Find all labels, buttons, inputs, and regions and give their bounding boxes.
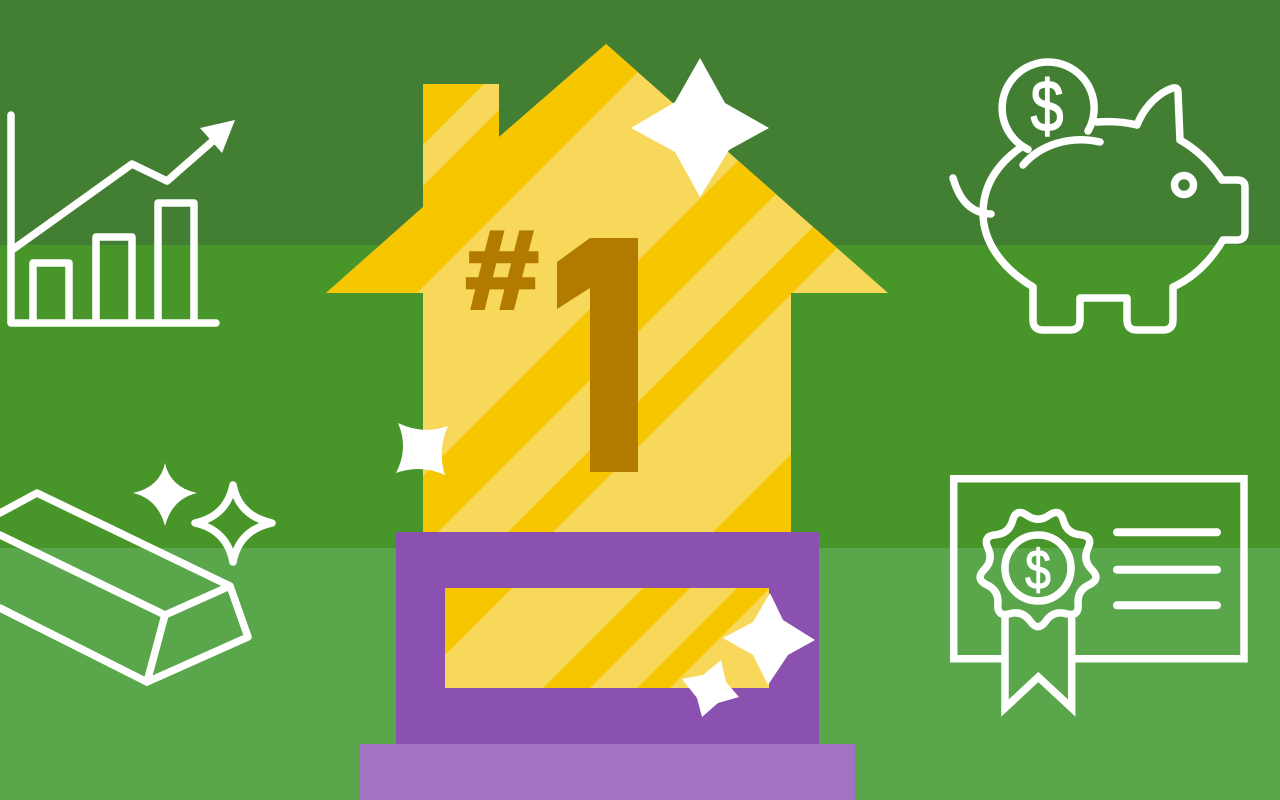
sparkles on trophy <box>396 58 815 717</box>
icon: piggy bank: $ <box>1031 65 1063 146</box>
icon: piggy bank <box>953 62 1245 330</box>
number one label <box>466 230 638 472</box>
icon: growth chart <box>11 115 235 323</box>
number one label: # <box>466 208 538 332</box>
trophy base <box>360 532 855 800</box>
number one label: 1 <box>512 165 701 545</box>
trophy house <box>326 44 888 532</box>
icon: bond certificate <box>954 479 1244 708</box>
nameplate <box>445 588 769 688</box>
icon: bond certificate: $ <box>1025 539 1051 601</box>
icon: gold bar with sparkles <box>0 463 272 682</box>
